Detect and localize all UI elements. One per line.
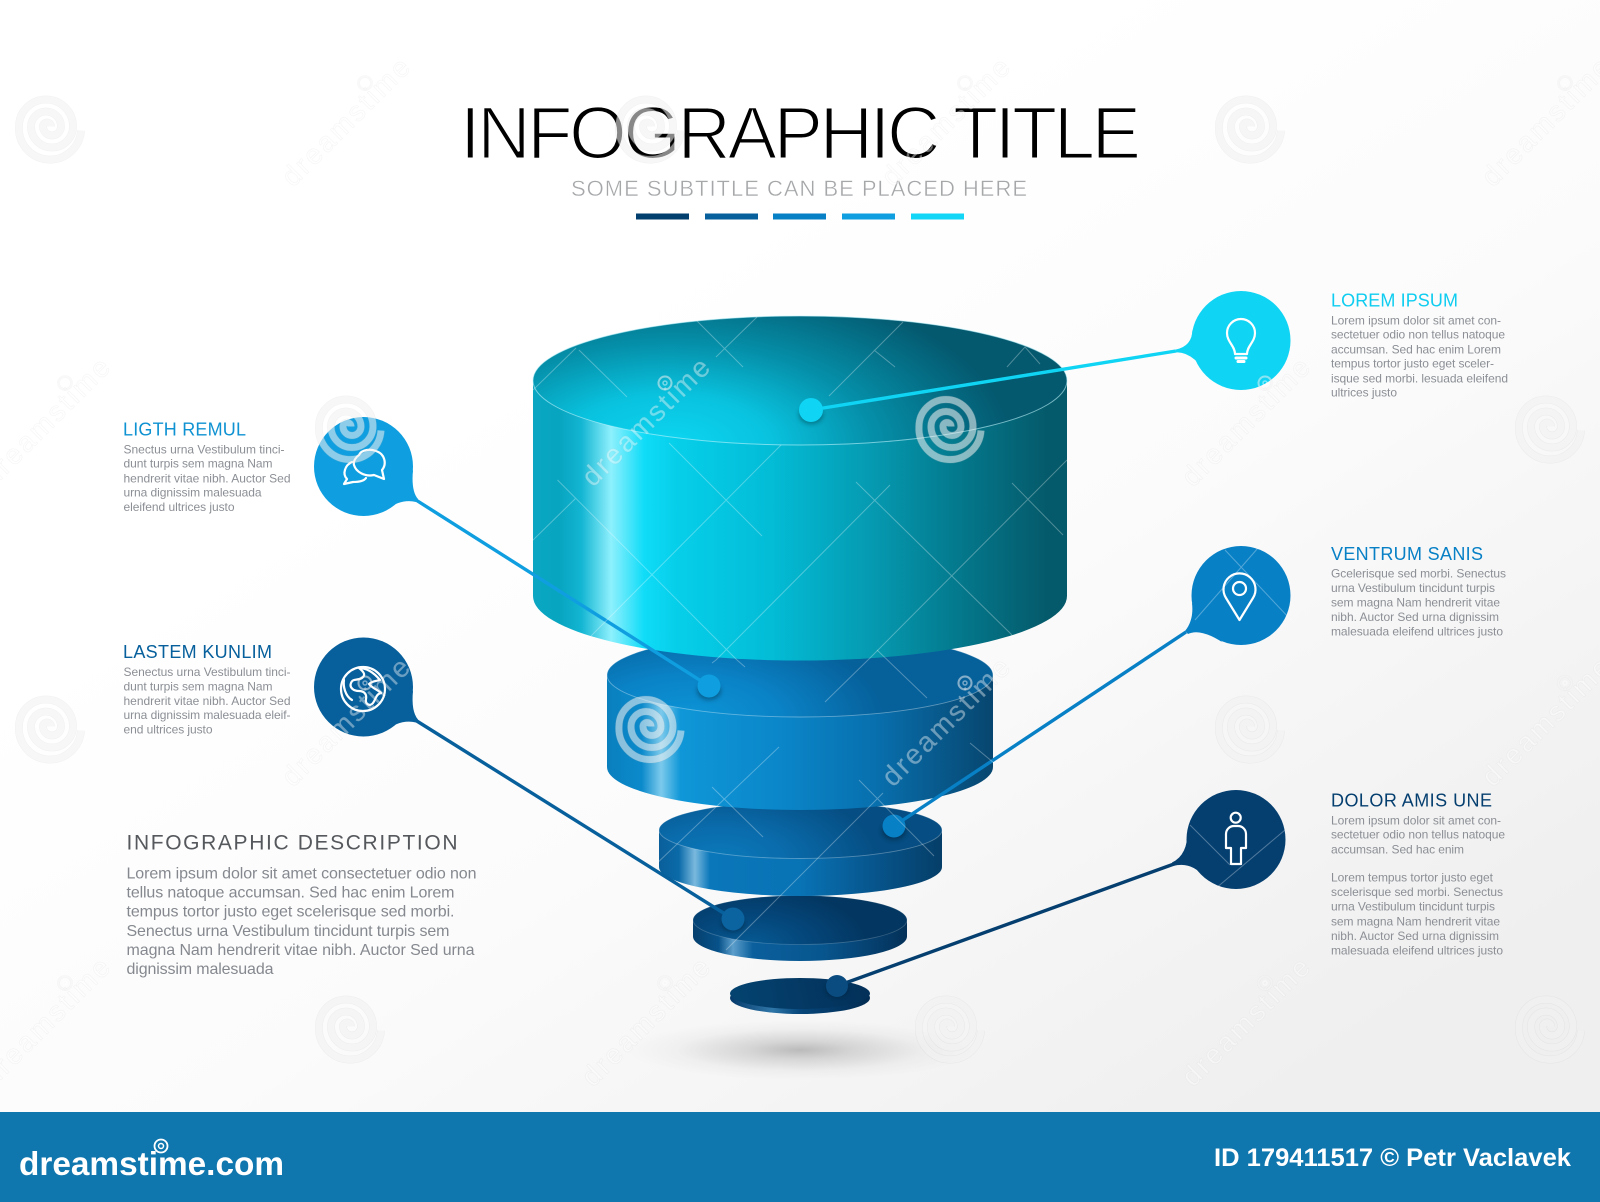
- text: ventrum sanis: malesuada eleifend ultrices justo: [1331, 625, 1503, 639]
- infographic description block: Lorem ipsum dolor sit amet consectetuer odio non: [126, 865, 476, 882]
- text: lastem kunlim: LASTEM KUNLIM: [123, 642, 272, 662]
- text: lastem kunlim: Senectus urna Vestibulum tinci-: [124, 665, 290, 679]
- text: dolor amis une: accumsan. Sed hac enim: [1331, 842, 1464, 856]
- infographic description block: INFOGRAPHIC DESCRIPTION: [126, 831, 458, 854]
- colour bars under the title: [636, 214, 964, 220]
- icon: location pin: [1224, 573, 1256, 620]
- level 1 cylinder: [533, 316, 1067, 660]
- text: dolor amis une: sem magna Nam hendrerit vitae: [1331, 914, 1500, 928]
- watermark text: dreamstime: [575, 952, 716, 1092]
- watermark text: dreamstime: [275, 652, 416, 792]
- text: ligth remul: dunt turpis sem magna Nam: [124, 457, 272, 471]
- text: lorem ipsum: isque sed morbi. lesuada eleifend: [1331, 371, 1508, 385]
- text: lastem kunlim: end ultrices justo: [124, 723, 213, 737]
- callout: lorem ipsum: [799, 291, 1290, 424]
- footer image id and credit: ID 179411517 © Petr Vaclavek: [1214, 1144, 1571, 1172]
- watermark thin crossing lines: [530, 317, 1291, 950]
- text: lorem ipsum: [1331, 291, 1508, 400]
- text: ligth remul: urna dignissim malesuada: [124, 486, 262, 500]
- text: lorem ipsum: Lorem ipsum dolor sit amet con-: [1331, 313, 1501, 327]
- callout: dolor amis une: [826, 790, 1286, 997]
- text: dolor amis une: Lorem tempus tortor justo eget: [1331, 871, 1494, 885]
- callout: ligth remul: [314, 417, 721, 700]
- callout: lastem kunlim: [314, 638, 745, 932]
- text: dolor amis une: DOLOR AMIS UNE: [1331, 791, 1492, 811]
- infographic description block: [126, 831, 476, 978]
- text: ligth remul: hendrerit vitae nibh. Auctor Sed: [124, 471, 290, 485]
- watermark spirals: [19, 100, 1581, 1060]
- text: lastem kunlim: dunt turpis sem magna Nam: [124, 679, 272, 693]
- icon: globe: [341, 667, 385, 711]
- text: dolor amis une: malesuada eleifend ultrices justo: [1331, 943, 1503, 957]
- text: ligth remul: LIGTH REMUL: [123, 420, 246, 440]
- callout: ventrum sanis: [882, 546, 1290, 840]
- text: dolor amis une: Lorem ipsum dolor sit amet con-: [1331, 813, 1501, 827]
- text: lastem kunlim: urna dignissim malesuada eleif-: [124, 708, 290, 722]
- text: ligth remul: Snectus urna Vestibulum tinci-: [124, 442, 284, 456]
- text: ligth remul: eleifend ultrices justo: [124, 500, 235, 514]
- footer band: [0, 1112, 1600, 1202]
- level 5 disc: [730, 978, 870, 1014]
- text: ventrum sanis: [1331, 544, 1506, 639]
- level 4 cylinder: [693, 896, 907, 961]
- subtitle: SOME SUBTITLE CAN BE PLACED HERE: [571, 176, 1027, 201]
- 3D funnel of five cylinders: [533, 316, 1067, 1014]
- text: dolor amis une: [1331, 791, 1505, 957]
- watermark text: dreamstime: [275, 52, 416, 192]
- text: lorem ipsum: accumsan. Sed hac enim Lorem: [1331, 342, 1501, 356]
- text: lastem kunlim: [123, 642, 290, 737]
- watermark text: dreamstime: [1175, 952, 1316, 1092]
- level 3 cylinder: [659, 802, 942, 896]
- text: ventrum sanis: Gcelerisque sed morbi. Senectus: [1331, 567, 1506, 581]
- watermark text: dreamstime: [1175, 352, 1316, 492]
- icon: light bulb: [1227, 319, 1255, 362]
- infographic description block: Senectus urna Vestibulum tincidunt turpis sem: [126, 923, 450, 940]
- footer logo: dreamstime.com: [19, 1145, 284, 1182]
- text: ventrum sanis: nibh. Auctor Sed urna dignissim: [1331, 610, 1499, 624]
- text: lorem ipsum: sectetuer odio non tellus natoque: [1331, 328, 1505, 342]
- text: ligth remul: [123, 420, 290, 514]
- text: dolor amis une: nibh. Auctor Sed urna dignissim: [1331, 929, 1499, 943]
- text: ventrum sanis: urna Vestibulum tincidunt turpis: [1331, 581, 1495, 595]
- text: ventrum sanis: sem magna Nam hendrerit vitae: [1331, 595, 1500, 609]
- watermark text: dreamstime: [575, 352, 716, 492]
- level 2 cylinder: [607, 633, 993, 810]
- infographic description block: tempus tortor justo eget scelerisque sed morbi.: [126, 904, 454, 921]
- infographic description block: dignissim malesuada: [126, 961, 274, 978]
- infographic description block: magna Nam hendrerit vitae nibh. Auctor Sed urna: [126, 942, 475, 959]
- icon: person: [1226, 813, 1246, 864]
- text: lorem ipsum: tempus tortor justo eget sceler-: [1331, 357, 1494, 371]
- title: INFOGRAPHIC TITLE: [460, 92, 1141, 174]
- text: lorem ipsum: ultrices justo: [1331, 386, 1397, 400]
- text: dolor amis une: scelerisque sed morbi. Senectus: [1331, 885, 1503, 899]
- text: lastem kunlim: hendrerit vitae nibh. Auctor Sed: [124, 694, 290, 708]
- watermark text: dreamstime: [875, 52, 1016, 192]
- icon: chat bubbles: [344, 450, 385, 484]
- text: lorem ipsum: LOREM IPSUM: [1331, 291, 1458, 311]
- text: ventrum sanis: VENTRUM SANIS: [1331, 544, 1483, 564]
- ground shadow: [625, 1020, 975, 1080]
- text: dolor amis une: sectetuer odio non tellus natoque: [1331, 828, 1505, 842]
- watermark text: dreamstime: [875, 652, 1016, 792]
- text: dolor amis une: urna Vestibulum tincidunt turpis: [1331, 900, 1495, 914]
- infographic description block: tellus natoque accumsan. Sed hac enim Lorem: [126, 884, 454, 901]
